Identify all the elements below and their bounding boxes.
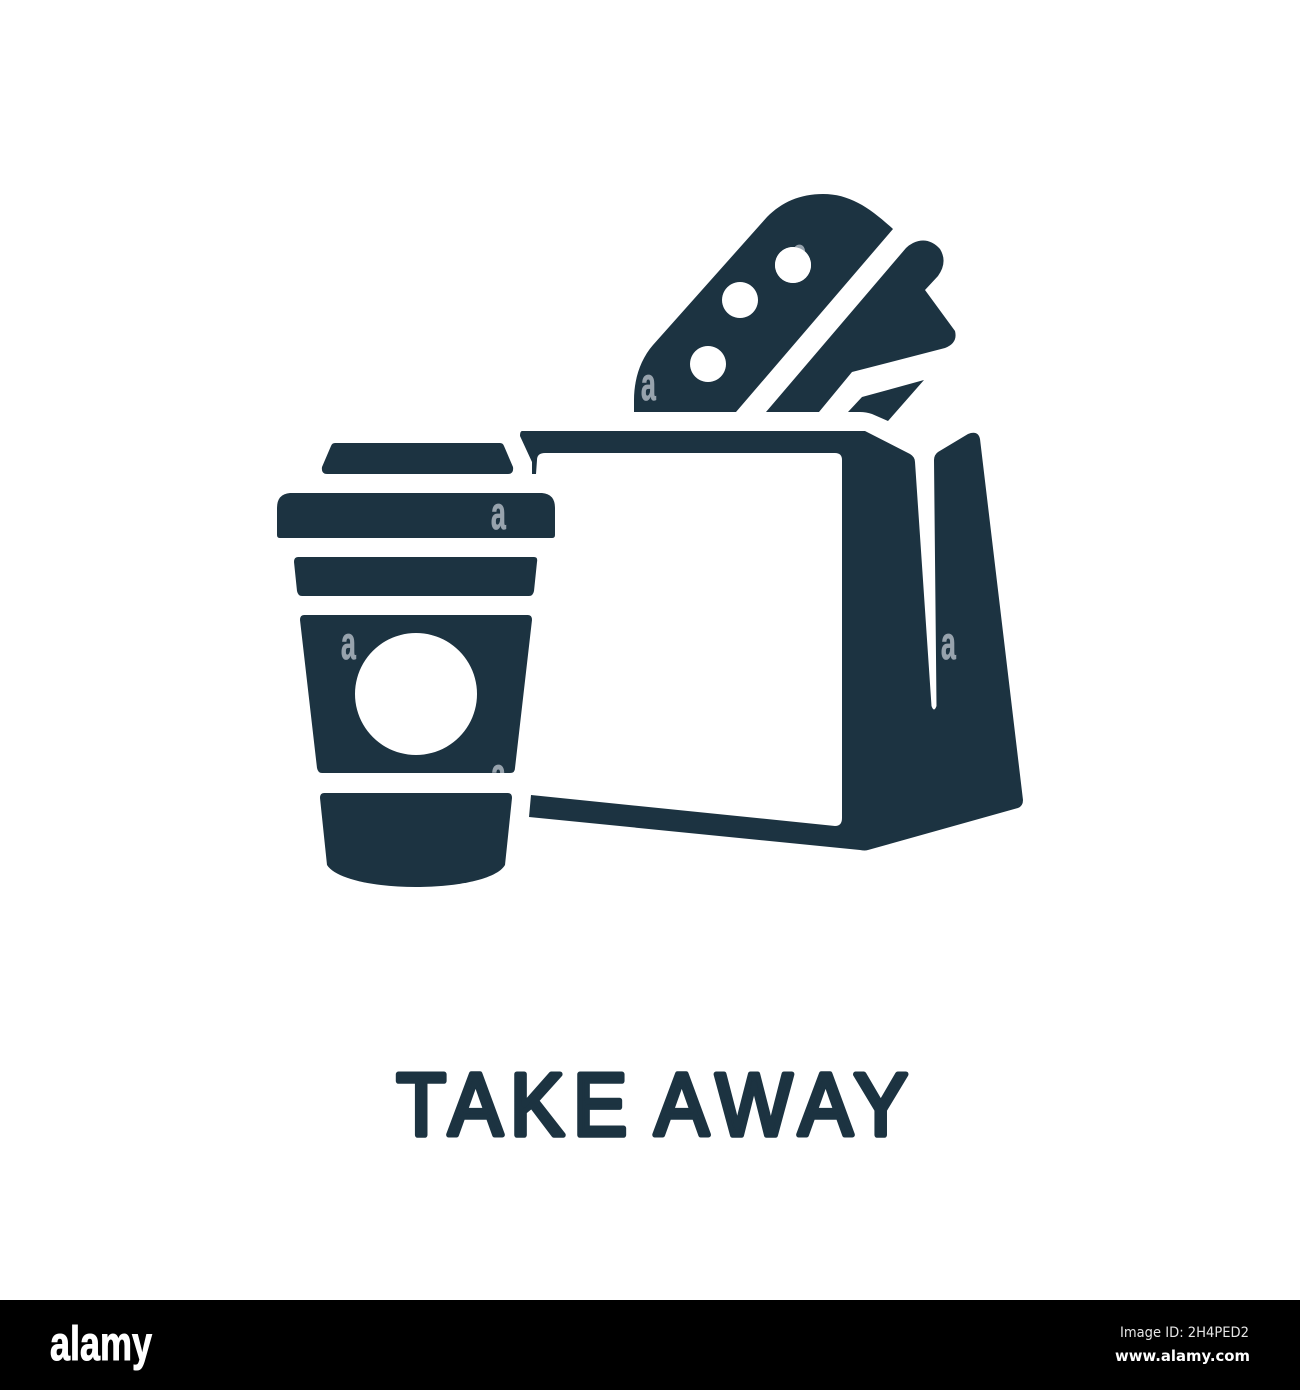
watermark letters xyxy=(341,228,957,800)
icon: coffee cup xyxy=(277,443,555,887)
sandwich top slice with seeds xyxy=(634,194,893,412)
seed hole over watermark xyxy=(775,247,811,283)
sandwich filling xyxy=(766,241,956,412)
cup sleeve with round label xyxy=(300,615,532,773)
footer logo: alamy xyxy=(50,1318,152,1371)
icon: sandwich xyxy=(634,194,956,421)
website: www.alamy.com xyxy=(1115,1347,1250,1365)
footer bar xyxy=(0,1300,1300,1390)
watermark a clipped at sleeve bottom: a xyxy=(491,748,507,800)
cup base xyxy=(320,793,512,887)
cup collar xyxy=(294,557,537,596)
watermark a on bag: a xyxy=(941,617,957,669)
title: TAKE AWAY xyxy=(397,1055,908,1154)
watermark a behind seed: a xyxy=(792,228,808,280)
bag front and side xyxy=(520,431,1023,850)
watermark a on sandwich: a xyxy=(641,358,657,410)
cup lid xyxy=(277,493,555,538)
cup lid top xyxy=(322,443,513,474)
watermark a on sleeve: a xyxy=(341,617,357,669)
icon: paper bag xyxy=(520,431,1023,850)
sandwich lower piece xyxy=(848,380,924,421)
image id: Image ID: 2H4PED2 xyxy=(1120,1325,1249,1341)
watermark a on lid: a xyxy=(491,487,507,539)
